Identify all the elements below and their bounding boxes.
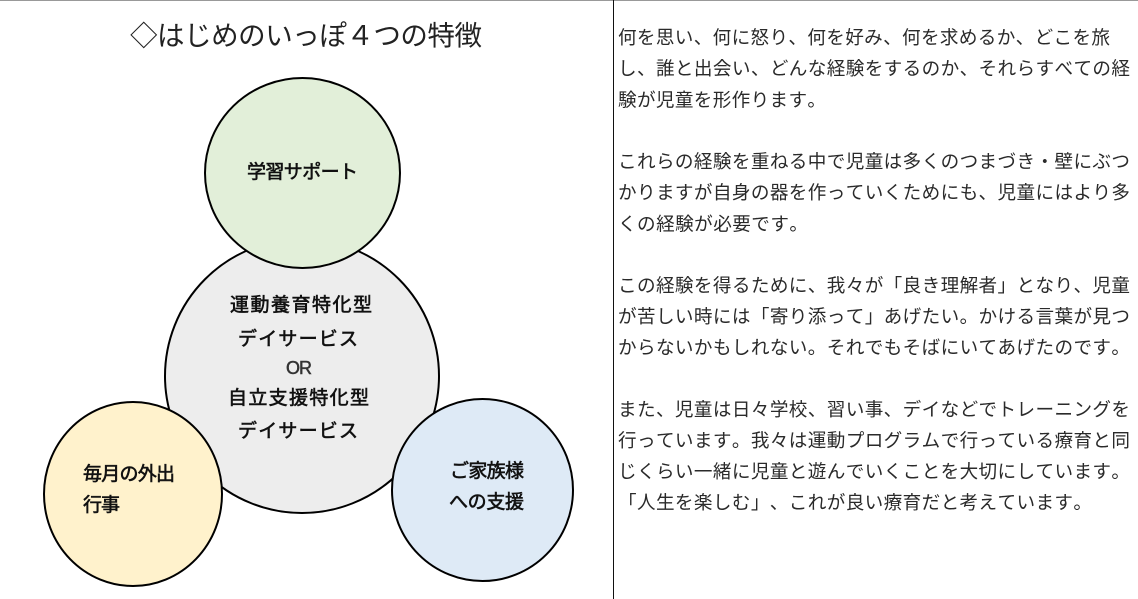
- paragraph 2: [618, 151, 1130, 234]
- circle: family support: [392, 399, 573, 581]
- paragraph 4: [618, 399, 1130, 513]
- circle: central day service: デイサービス: [238, 328, 358, 350]
- paragraph 3: が苦しい時には「寄り添って」あげたい。かける言葉が見つ: [618, 306, 1130, 327]
- title: ◇はじめのいっぽ４つの特徴: [130, 20, 482, 51]
- paragraph 4: 行っています。我々は運動プログラムで行っている療育と同: [618, 430, 1130, 451]
- circle: family support: への支援: [449, 491, 524, 513]
- circle: central day service: [165, 239, 439, 513]
- paragraph 2: これらの経験を重ねる中で児童は多くのつまづき・壁にぶつ: [618, 151, 1130, 172]
- paragraph 1: 験が児童を形作ります。: [618, 90, 826, 110]
- paragraph 1: 何を思い、何に怒り、何を好み、何を求めるか、どこを旅: [618, 27, 1110, 48]
- paragraph 3: からないかもしれない。それでもそばにいてあげたのです。: [618, 337, 1130, 358]
- panel: feature diagram: [44, 78, 573, 586]
- paragraph 4: じくらい一緒に児童と遊んでいくことを大切にしています。: [618, 461, 1130, 482]
- circle: monthly outings: 毎月の外出: [83, 463, 175, 485]
- paragraph 4: 「人生を楽しむ」、これが良い療育だと考えています。: [618, 492, 1092, 513]
- text block: right column: [618, 27, 1130, 513]
- paragraph 3: [618, 275, 1130, 358]
- circle: central day service: 自立支援特化型: [228, 387, 369, 409]
- paragraph 4: また、児童は日々学校、習い事、デイなどでトレーニングを: [618, 399, 1130, 420]
- circle: monthly outings: 行事: [83, 494, 120, 516]
- paragraph 2: かりますが自身の器を作っていくためにも、児童にはより多: [618, 182, 1130, 203]
- paragraph 1: [618, 27, 1130, 110]
- circle: learning support: 学習サポート: [247, 161, 358, 183]
- circle: central day service: OR: [286, 358, 312, 378]
- circle: monthly outings: [44, 402, 222, 586]
- circle: learning support: [205, 78, 400, 268]
- circle: central day service: デイサービス: [238, 420, 358, 442]
- circle: family support: ご家族様: [450, 460, 524, 482]
- paragraph 2: くの経験が必要です。: [618, 214, 808, 234]
- circle: central day service: 運動養育特化型: [230, 294, 372, 316]
- paragraph 1: し、誰と出会い、どんな経験をするのか、それらすべての経: [618, 58, 1130, 79]
- paragraph 3: この経験を得るために、我々が「良き理解者」となり、児童: [618, 275, 1130, 296]
